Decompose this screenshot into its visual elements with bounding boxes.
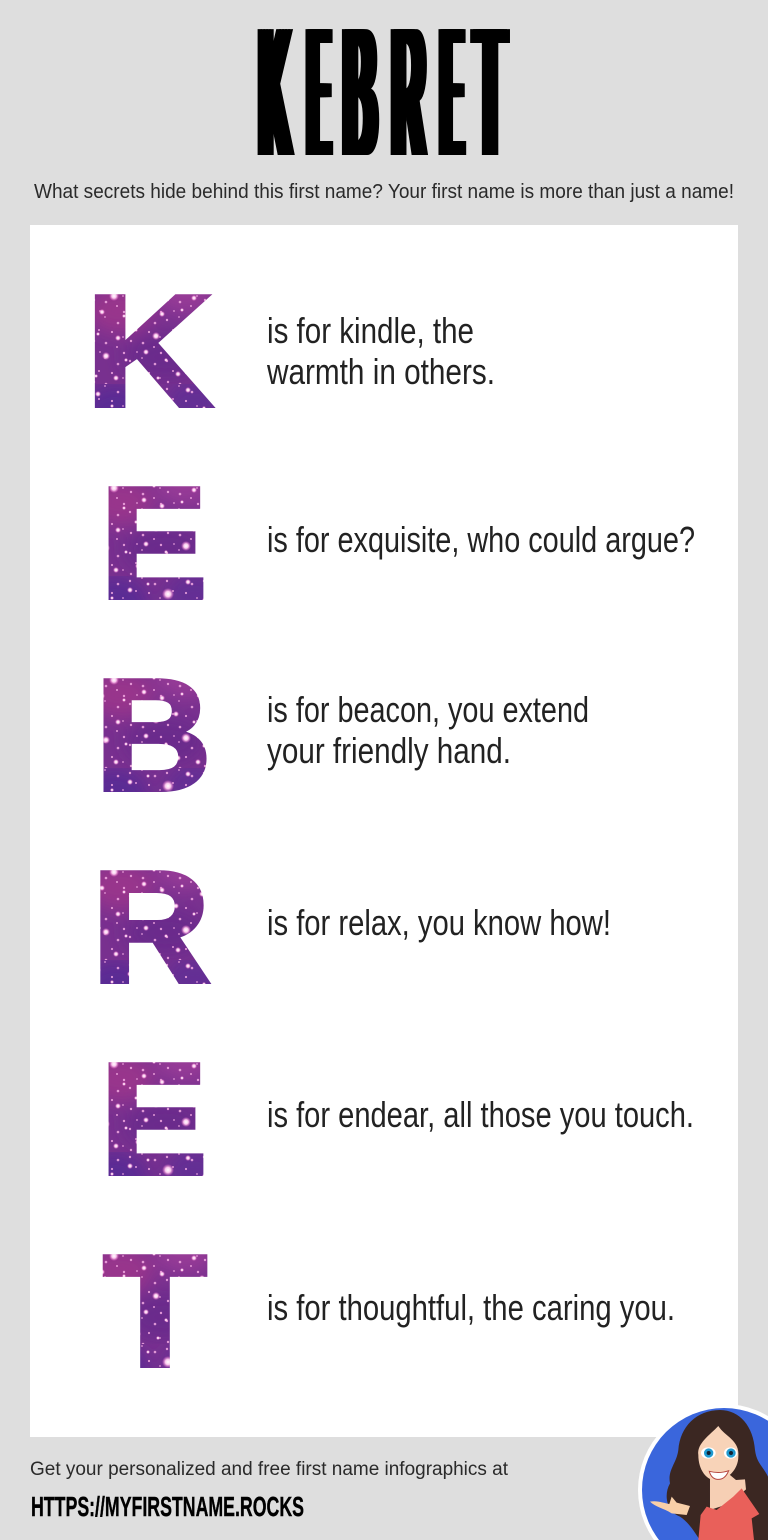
row: E: [100, 456, 695, 632]
letter R: R: [92, 840, 210, 1016]
letter E: E: [100, 1032, 207, 1208]
row: T: [104, 1224, 675, 1400]
footer url: HTTPS://MYFIRSTNAME.ROCKS: [31, 1491, 304, 1522]
subtitle: What secrets hide behind this first name? Your first name is more than just a name!: [34, 181, 734, 203]
text: B line: your friendly hand.: [267, 730, 511, 771]
row: E: [100, 1032, 694, 1208]
title: [258, 0, 510, 194]
letter T: T: [104, 1224, 206, 1400]
text: B line: is for beacon, you extend: [267, 689, 589, 730]
text: K line: is for kindle, the: [267, 310, 474, 351]
row: B: [95, 648, 589, 824]
icon: avatar: [638, 1404, 768, 1540]
text: R line: is for relax, you know how!: [267, 902, 611, 943]
text: T line: is for thoughtful, the caring you.: [267, 1287, 675, 1328]
row: R: [92, 840, 611, 1016]
panel: letters: [30, 225, 738, 1437]
letter K: K: [86, 264, 212, 440]
letter E: E: [100, 456, 207, 632]
text: K line: warmth in others.: [266, 351, 495, 392]
footer text: Get your personalized and free first name infographics at: [30, 1459, 509, 1480]
row: K: [86, 264, 495, 440]
letter B: B: [95, 648, 211, 824]
